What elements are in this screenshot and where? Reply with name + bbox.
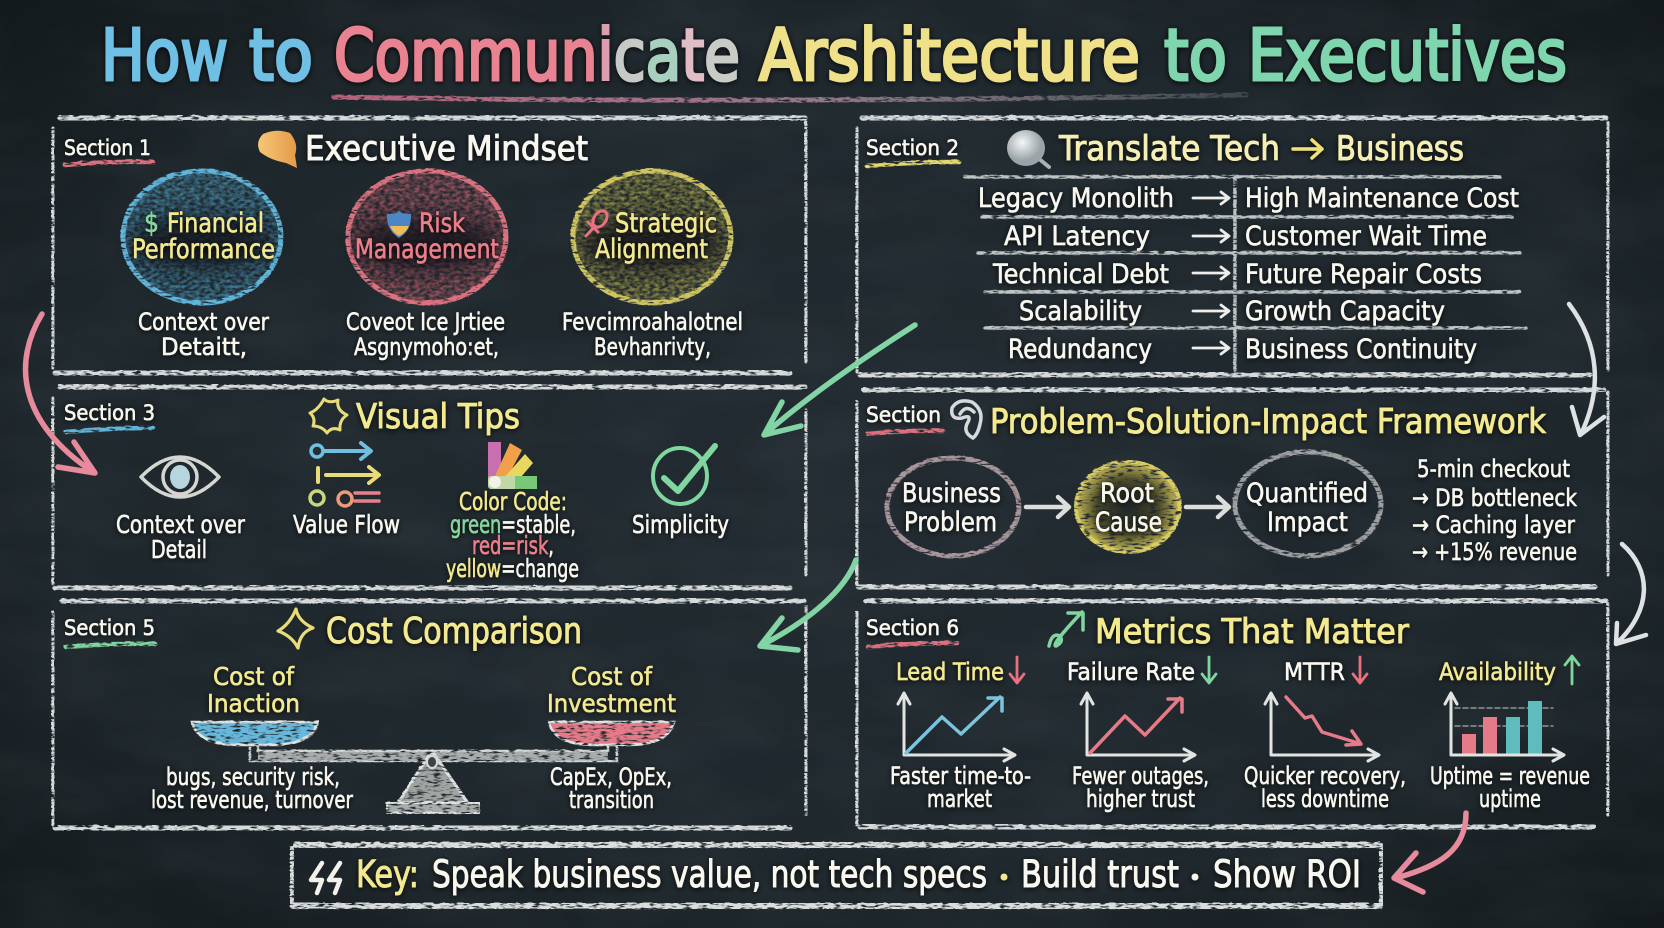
- heading: Executive Mindset: [305, 129, 588, 169]
- balance scale: [192, 722, 674, 813]
- section 4 underline: [868, 431, 943, 434]
- circle captions: Coveot Ice Jrtiee: [346, 308, 505, 336]
- title: Executives: [1248, 14, 1567, 97]
- step: business problem: [887, 458, 1019, 556]
- title: to: [1164, 14, 1227, 97]
- icon: key glyph: [311, 863, 340, 893]
- tip: color code: [446, 442, 579, 583]
- arrow: section 1 to section 3: [26, 314, 95, 473]
- cost labels: Investment: [547, 689, 676, 718]
- key text: Build trust: [1021, 853, 1179, 896]
- section 3 label: Section 3: [64, 401, 155, 425]
- metric: availability: Availability: [1439, 658, 1556, 686]
- icon: star outline: [278, 609, 313, 648]
- translation table: Legacy Monolith: [978, 183, 1174, 214]
- translation table: API Latency: [1004, 221, 1150, 252]
- arrow: section 2 to section 3: [764, 325, 915, 435]
- metric: lead time: [890, 657, 1031, 813]
- arrow: cause to impact: [1186, 497, 1229, 517]
- circle captions: Bevhanrivty,: [594, 333, 711, 361]
- circle captions: Fevcimroahalotnel: [562, 308, 743, 336]
- title: [101, 14, 1567, 97]
- panel: section 3 visual tips: [53, 387, 806, 588]
- translation table: Business Continuity: [1245, 334, 1477, 365]
- cost labels: CapEx, OpEx,: [550, 763, 672, 791]
- title: Communicate: [334, 14, 740, 97]
- tip: context over detail: Context over: [116, 510, 246, 539]
- tip: context over detail: Detail: [151, 535, 207, 564]
- section 6 underline: [868, 643, 957, 647]
- panel: section 1 executive mindset: [53, 118, 806, 373]
- translation table: Scalability: [1019, 296, 1142, 327]
- circle: risk management: Management: [355, 234, 499, 265]
- metric: availability: [1430, 656, 1590, 813]
- metric: lead time: Faster time-to-: [890, 762, 1031, 790]
- translation table: Redundancy: [1008, 334, 1152, 365]
- tip: simplicity: [632, 446, 729, 539]
- example list: [1412, 455, 1577, 566]
- cost labels: Inaction: [207, 689, 300, 718]
- heading: [1058, 129, 1464, 169]
- circle: financial performance: Financial: [167, 208, 264, 239]
- circle: strategic alignment: [573, 171, 731, 303]
- metric: mttr: less downtime: [1261, 785, 1389, 813]
- section 5 label: Section 5: [64, 616, 155, 640]
- example list: 5-min checkout: [1417, 455, 1570, 483]
- circle: strategic alignment: Strategic: [615, 208, 717, 239]
- step: quantified impact: Quantified: [1246, 478, 1368, 509]
- section 2 label: Section 2: [866, 136, 959, 160]
- step: business problem: Problem: [904, 507, 997, 538]
- tip: color code: yellow=change: [446, 554, 579, 583]
- arrow: section 6 to key box: [1394, 813, 1466, 892]
- circle: financial performance: Performance: [132, 234, 275, 265]
- title: to: [249, 14, 313, 97]
- tip: color code: green=stable,: [450, 510, 576, 539]
- step: root cause: [1076, 462, 1180, 552]
- key takeaway box: [292, 845, 1381, 906]
- example list: → Caching layer: [1412, 511, 1575, 539]
- tip: value flow: Value Flow: [293, 510, 400, 539]
- example list: → DB bottleneck: [1412, 484, 1577, 512]
- heading: Problem-Solution-Impact Framework: [990, 402, 1546, 442]
- metric: availability: uptime: [1479, 785, 1541, 813]
- metric: mttr: Quicker recovery,: [1244, 762, 1406, 790]
- metric: availability: Uptime = revenue: [1430, 762, 1590, 790]
- circle captions: Context over: [138, 308, 269, 336]
- step: quantified impact: Impact: [1267, 507, 1348, 538]
- step: root cause: Cause: [1095, 507, 1162, 538]
- heading: Business: [1336, 129, 1464, 169]
- metric: lead time: Lead Time: [896, 658, 1004, 686]
- heading: Visual Tips: [356, 397, 520, 437]
- tip: context over detail: [116, 457, 246, 564]
- metric: failure rate: higher trust: [1086, 785, 1195, 813]
- step: root cause: Root: [1100, 478, 1154, 509]
- heading: Cost Comparison: [326, 611, 582, 652]
- title: Arshitecture: [759, 14, 1140, 97]
- tip: value flow: [293, 443, 400, 539]
- section 3 underline: [66, 428, 153, 432]
- section 6 label: Section 6: [866, 616, 959, 640]
- translation table: Growth Capacity: [1245, 296, 1445, 327]
- translation table: Customer Wait Time: [1245, 221, 1487, 252]
- panel: section 4 problem solution impact: [857, 390, 1608, 587]
- cost labels: lost revenue, turnover: [151, 786, 353, 814]
- heading: Metrics That Matter: [1095, 612, 1409, 652]
- cost labels: Cost of: [571, 662, 653, 691]
- example list: → +15% revenue: [1412, 538, 1577, 566]
- translation table: Future Repair Costs: [1245, 259, 1482, 290]
- circle captions: [138, 308, 743, 361]
- arrow: section 4 to section 6: [1616, 544, 1646, 644]
- metric: failure rate: Failure Rate: [1067, 658, 1195, 686]
- key text: Show ROI: [1213, 853, 1361, 896]
- cost labels: transition: [569, 786, 654, 814]
- tip: simplicity: Simplicity: [632, 510, 729, 539]
- key text: Speak business value, not tech specs: [432, 853, 987, 896]
- icon: magnifier: [1007, 130, 1049, 167]
- icon: growth arrow: [1049, 612, 1083, 646]
- circle: risk management: Risk: [419, 208, 465, 239]
- tip: color code: red=risk,: [472, 531, 554, 560]
- translation table: Technical Debt: [992, 259, 1169, 290]
- circle: strategic alignment: Alignment: [595, 234, 708, 265]
- icon: star outline: [310, 399, 347, 433]
- arrow: problem to cause: [1026, 497, 1069, 517]
- step: business problem: Business: [902, 478, 1001, 509]
- section 5 underline: [66, 644, 155, 647]
- section 1 underline: [65, 162, 153, 165]
- circle: financial performance: $: [144, 208, 159, 239]
- metric: mttr: MTTR: [1284, 658, 1345, 686]
- cost labels: bugs, security risk,: [166, 763, 340, 791]
- icon: head: [258, 131, 297, 168]
- metric: lead time: market: [927, 785, 992, 813]
- circle: risk management: [348, 171, 506, 303]
- circle captions: Asgnymoho:et,: [354, 333, 499, 361]
- panel: section 6 metrics that matter: [857, 601, 1608, 827]
- section 1 label: Section 1: [64, 136, 151, 160]
- title underline: [334, 95, 1246, 100]
- panel: section 5 cost comparison: [53, 601, 806, 828]
- key text: Key:: [356, 853, 419, 896]
- icon: swirl: [952, 401, 981, 438]
- heading: Translate Tech: [1058, 129, 1280, 169]
- title: How: [101, 14, 228, 97]
- metric: failure rate: Fewer outages,: [1072, 762, 1209, 790]
- translation table: [965, 177, 1526, 370]
- arrow: section 2 to section 4: [1569, 304, 1604, 435]
- key text: [356, 853, 1361, 896]
- step: quantified impact: [1235, 452, 1381, 556]
- metric: mttr: [1244, 657, 1406, 813]
- section 4 label: Section: [866, 403, 941, 427]
- arrow: section 4 to section 5: [760, 560, 856, 650]
- panel: section 2 translate tech to business: [857, 118, 1608, 375]
- cost labels: [151, 662, 676, 814]
- translation table: High Maintenance Cost: [1245, 183, 1519, 214]
- section 2 underline: [867, 162, 959, 166]
- metric: failure rate: [1067, 657, 1216, 813]
- cost labels: Cost of: [213, 662, 295, 691]
- circle captions: Detaitt,: [161, 333, 247, 361]
- circle: financial performance: [123, 171, 281, 303]
- tip: color code: Color Code:: [459, 487, 567, 516]
